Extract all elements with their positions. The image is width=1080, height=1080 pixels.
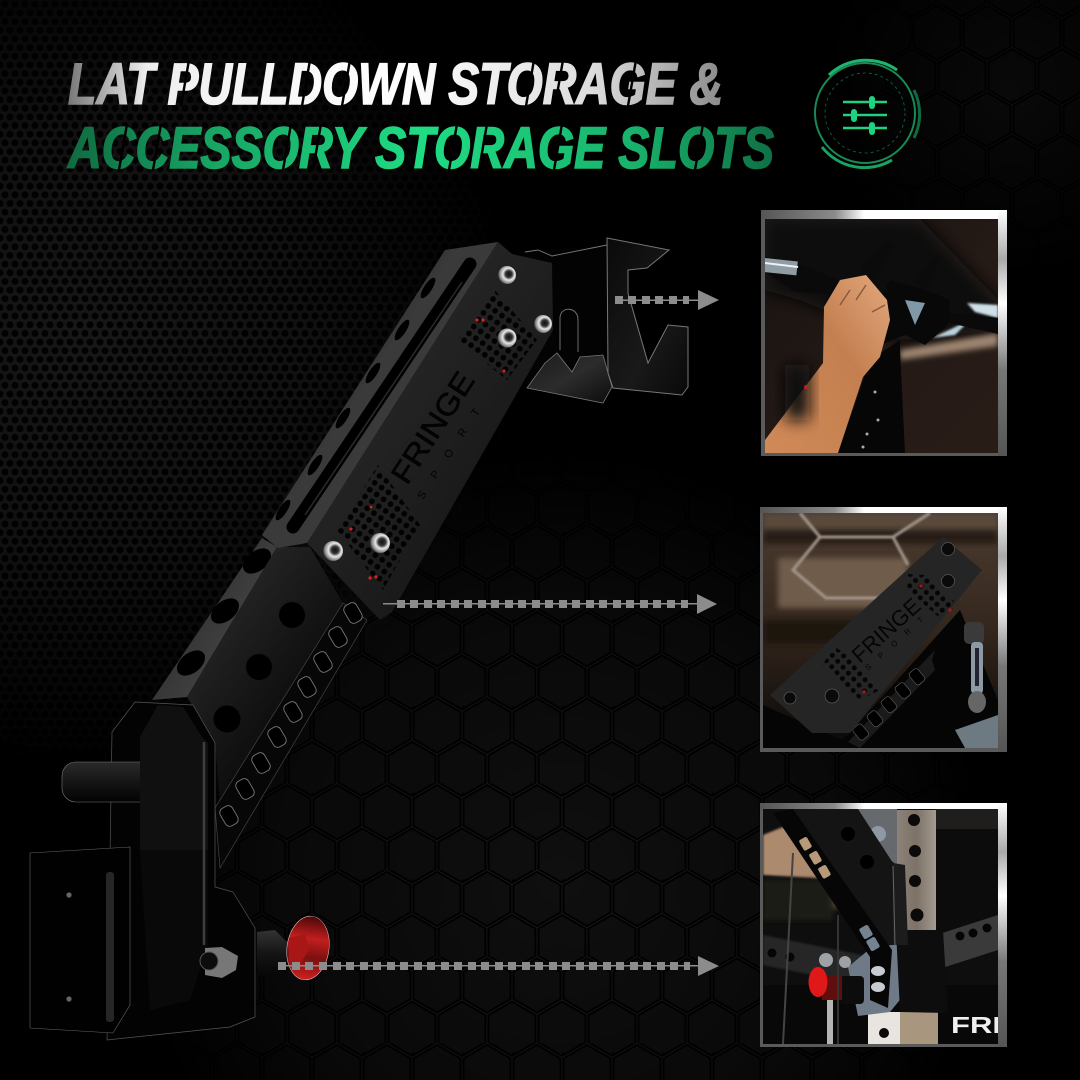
hook bracket top band xyxy=(525,245,612,388)
base front plate xyxy=(140,705,208,1010)
upper sleeve branded plate xyxy=(307,242,553,620)
title line 2: accessory storage slots: ACCESSORY STORAGE SLOTS xyxy=(66,116,774,181)
photo 2 brand text: sport: SPORT xyxy=(863,607,934,672)
lower arm front face with round holes xyxy=(187,547,343,803)
photo 2 scene xyxy=(763,513,998,748)
photo 2 brand text: fringe: FRINGE xyxy=(847,593,926,668)
panel: photo of installed arm with red pull pin xyxy=(760,803,1007,1047)
arrow: hook to photo 1 xyxy=(615,290,719,310)
front hook plate xyxy=(607,238,688,395)
icon: sliders in circular hud ring xyxy=(815,60,920,168)
photo 3 wall text: FRI xyxy=(951,1012,1001,1038)
pull pin stem xyxy=(257,930,290,978)
photo 1 scene xyxy=(764,219,998,453)
lower arm side face with round holes xyxy=(152,538,277,700)
photo 2 frame xyxy=(760,507,1007,752)
base back plate xyxy=(107,702,255,1040)
photo 3 red knob xyxy=(808,967,828,997)
panel: photo of hand hanging bar on hook xyxy=(761,210,1007,456)
photo 3 frame xyxy=(760,803,1007,1047)
pin xyxy=(62,762,184,802)
rear hook plate xyxy=(527,353,612,403)
arrow: plate to photo 2 xyxy=(383,594,717,614)
plate rivets xyxy=(323,266,552,561)
bolt xyxy=(200,947,238,978)
brand text: fringe: FRINGE xyxy=(385,366,481,490)
panel: photo of branded storage plate xyxy=(760,507,1007,752)
upper sleeve side with long slot xyxy=(262,242,498,548)
red knob xyxy=(283,913,333,983)
photo 3 scene xyxy=(763,809,1001,1045)
title xyxy=(66,52,774,181)
brand text: sport: SPORT xyxy=(415,392,492,502)
title line 1: lat pulldown storage: LAT PULLDOWN STORAGE & xyxy=(68,52,723,117)
lower arm slotted strip xyxy=(215,601,367,868)
photo 1 frame xyxy=(761,210,1007,456)
j-cup bracket xyxy=(30,847,130,1033)
product: lat pulldown storage arm xyxy=(30,238,688,1040)
arrow: pull pin to photo 3 xyxy=(278,956,719,976)
